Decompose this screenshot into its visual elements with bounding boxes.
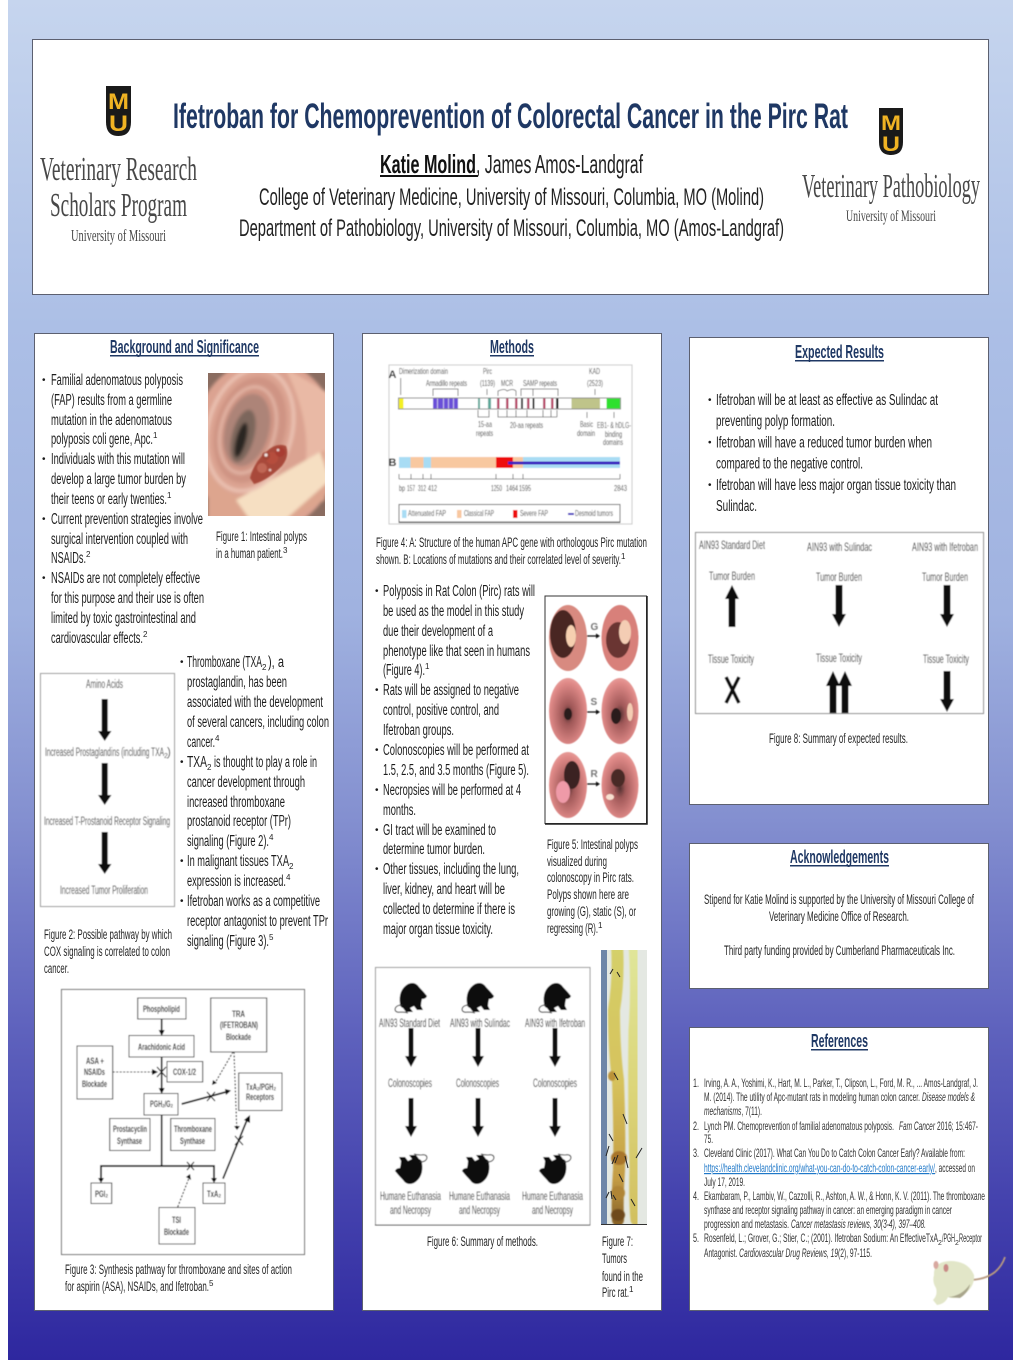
heading: expected results — [795, 342, 884, 362]
figure 3: thromboxane synthesis pathway: TSI — [172, 1215, 181, 1225]
figure 8: expected results summary — [696, 532, 984, 714]
text block: background bullets: Individuals with this mutation will — [51, 451, 185, 468]
figure 4: APC gene structure diagram: MCR — [501, 378, 513, 388]
text block: thromboxane bullets: In malignant tissues TXA — [187, 853, 289, 870]
heading: acknowledgements: Acknowledgements — [790, 847, 889, 867]
text block: background bullets: • — [42, 454, 46, 465]
figure 2: pathway flowchart: Increased Prostaglandins (including TXA — [45, 747, 164, 759]
figure 6: summary of methods flowchart: Humane Euthanasia — [380, 1189, 441, 1203]
text block: methods bullets: • — [375, 864, 379, 875]
text block: acknowledgements — [704, 892, 974, 958]
figure 4: APC gene structure diagram: (2523) — [587, 378, 603, 388]
figure 3: thromboxane synthesis pathway: Arachidonic Acid — [138, 1042, 185, 1052]
text block: methods bullets: major organ tissue toxicity. — [383, 921, 493, 938]
text block: methods bullets: (Figure 4). — [383, 662, 425, 679]
text block: background bullets: 1 — [153, 431, 158, 440]
icon: inverted rat standard diet — [395, 1154, 427, 1184]
caption: figure 1: 3 — [283, 546, 288, 555]
text block: reference list: 2. — [693, 1119, 699, 1133]
text block: expected results bullets — [708, 392, 956, 515]
panel: references — [690, 1028, 1005, 1310]
figure 4: APC gene structure diagram: bp — [399, 483, 405, 493]
figure 8: expected results summary: AIN93 Standard Diet — [699, 538, 765, 552]
text block: reference list: 75. — [704, 1132, 713, 1146]
caption: figure 6: Figure 6: Summary of methods. — [427, 1234, 538, 1249]
figure 4: APC gene structure diagram: 20-aa repeats — [510, 420, 543, 430]
arrow: tumor burden up — [725, 585, 739, 627]
text block: methods bullets: liver, kidney, and heart will be — [383, 881, 505, 898]
arrow: prostaglandins to receptor signaling — [98, 763, 112, 805]
icon: MU shield left: M — [108, 89, 129, 114]
figure 3: thromboxane synthesis pathway: (IFETROBAN) — [220, 1020, 258, 1030]
figure 4: APC gene structure diagram: binding — [605, 429, 622, 439]
text block: thromboxane bullets: 5 — [269, 933, 274, 942]
text block: thromboxane bullets: ), a — [268, 654, 284, 671]
figure 2: pathway flowchart: Increased T-Prostanoid Receptor Signaling — [44, 816, 170, 828]
caption: figure 7: found in the — [602, 1269, 643, 1284]
text block: thromboxane bullets: signaling (Figure 2). — [187, 833, 269, 850]
figure 4: APC gene structure diagram: KAD — [589, 366, 600, 376]
header panel — [32, 40, 988, 294]
figure 6: summary of methods flowchart: AIN93 Standard Diet — [379, 1016, 440, 1030]
text block: thromboxane bullets: prostanoid receptor (TPr) — [187, 813, 291, 830]
text block: methods bullets: Colonoscopies will be performed at — [383, 742, 529, 759]
text block: methods bullets — [375, 583, 535, 938]
figure 4: APC gene structure diagram: domain — [577, 428, 595, 438]
text block: background bullets: for this purpose and their use is often — [51, 590, 204, 607]
text block: background bullets: surgical intervention coupled with — [51, 531, 188, 548]
text block: expected results bullets: • — [708, 480, 712, 491]
text block: thromboxane bullets: prostaglandin, has been — [187, 674, 287, 691]
figure 6: summary of methods flowchart: AIN93 with Sulindac — [450, 1016, 510, 1030]
text block: methods bullets: Other tissues, including the lung, — [383, 861, 519, 878]
figure 4: APC gene structure diagram: 2843 — [614, 483, 627, 493]
text block: thromboxane bullets: cancer development through — [187, 774, 305, 791]
text block: reference list — [693, 1076, 985, 1260]
figure 4: APC gene structure diagram: A — [388, 369, 396, 381]
caption: figure 7: 1 — [629, 1285, 634, 1294]
text block: methods bullets: Polyposis in Rat Colon (Pirc) rats will — [383, 583, 535, 600]
caption: figure 7: Tumors — [602, 1251, 627, 1266]
figure 8: expected results summary: AIN93 with Sulindac — [807, 540, 872, 554]
figure 3: thromboxane synthesis pathway: Blockade — [82, 1079, 107, 1089]
figure 2: pathway flowchart: Amino Acids — [86, 679, 123, 691]
arrows: toxicity double up — [826, 671, 852, 713]
figure 3: thromboxane synthesis pathway: TRA — [232, 1009, 245, 1019]
logo text: Veterinary Research Scholars Program: University of Missouri — [71, 226, 166, 245]
figure 4: APC gene structure diagram: Basic — [580, 419, 593, 429]
figure 4: APC gene structure diagram: repeats — [476, 428, 493, 438]
figure 6: summary of methods flowchart: AIN93 with Ifetroban — [525, 1016, 585, 1030]
panel: methods — [362, 334, 662, 1310]
text block: background bullets: 1 — [167, 491, 172, 500]
caption: figure 2: Figure 2: Possible pathway by which — [44, 927, 172, 942]
text block: reference list: 4. — [693, 1189, 699, 1203]
figure 6: summary of methods flowchart: Humane Euthanasia — [522, 1189, 583, 1203]
figure 4: APC gene structure diagram: SAMP repeats — [523, 378, 557, 388]
figure 4: APC gene structure diagram: B — [388, 457, 396, 469]
text block: reference list: Receptor — [959, 1231, 982, 1245]
text block: background bullets: mutation in the adenomatous — [51, 412, 172, 429]
text block: thromboxane bullets: 4 — [269, 833, 274, 842]
figure 8: expected results summary: Tumor Burden — [816, 570, 862, 584]
figure 3: thromboxane synthesis pathway: ASA + — [86, 1056, 104, 1066]
text block: thromboxane bullets: of several cancers, including colon — [187, 714, 329, 731]
text block: methods bullets: Rats will be assigned to negative — [383, 682, 519, 699]
text block: methods bullets: due their development of a — [383, 623, 493, 640]
text block: thromboxane bullets: • — [180, 856, 184, 867]
text block: reference list: progression and metastasis. — [704, 1217, 789, 1231]
icon: rat sulindac — [462, 983, 494, 1013]
text block: methods bullets: GI tract will be examined to — [383, 822, 496, 839]
figure 3: thromboxane synthesis pathway: Synthase — [180, 1136, 205, 1146]
legend: FAP severity — [399, 504, 620, 523]
panel: acknowledgements — [690, 844, 988, 988]
caption: figure 7: Figure 7: — [602, 1234, 633, 1249]
text block: thromboxane bullets: is thought to play a role in — [214, 754, 317, 771]
caption: figure 3 — [65, 1262, 292, 1294]
text block: thromboxane bullets: 4 — [286, 873, 291, 882]
figure 3: thromboxane synthesis pathway: Prostacyclin — [113, 1124, 147, 1134]
caption: figure 4: 1 — [621, 552, 626, 561]
icon: inverted rat sulindac — [462, 1154, 494, 1184]
figure 4: APC gene structure diagram: 157 — [407, 483, 415, 493]
text block: background bullets: limited by toxic gastrointestinal and — [51, 610, 196, 627]
text block: thromboxane bullets: expression is increased. — [187, 873, 286, 890]
text block: thromboxane bullets — [180, 654, 329, 950]
text block: background bullets: • — [42, 514, 46, 525]
caption: figure 2: COX signaling is correlated to colon — [44, 944, 170, 959]
icon: no toxicity X — [726, 677, 739, 703]
figure 3: thromboxane synthesis pathway: Thromboxane — [174, 1124, 212, 1134]
figure 6: summary of methods flowchart: Colonoscopies — [388, 1076, 432, 1090]
caption: figure 1: Figure 1: Intestinal polyps — [216, 529, 307, 544]
figure 6: summary of methods flowchart: Colonoscopies — [533, 1076, 577, 1090]
text block: thromboxane bullets: 2 — [262, 663, 267, 672]
text block: background bullets: Current prevention strategies involve — [51, 511, 203, 528]
caption: figure 5: visualized during — [547, 854, 607, 869]
text block: thromboxane bullets: 4 — [215, 734, 220, 743]
text block: reference list: 5. — [693, 1231, 699, 1245]
text block: methods bullets: 1 — [425, 662, 430, 671]
text block: methods bullets: Necropsies will be performed at 4 — [383, 782, 521, 799]
text block: methods bullets: control, positive control, and — [383, 702, 499, 719]
heading: background and significance: Background and Significance — [110, 337, 259, 357]
icon: rat ifetroban — [539, 983, 571, 1013]
text block: reference list: July 17, 2019. — [704, 1175, 745, 1189]
figure 6: summary of methods flowchart: Humane Euthanasia — [449, 1189, 510, 1203]
heading: references: References — [811, 1031, 868, 1051]
text block: background bullets: NSAIDs. — [51, 550, 86, 567]
text block: thromboxane bullets: • — [180, 657, 184, 668]
logo text: Veterinary Research Scholars Program: Scholars Program — [50, 187, 187, 224]
text block: reference list: 2 — [938, 1240, 942, 1247]
icon: MU shield right — [879, 108, 903, 156]
icon: MU shield right: U — [882, 133, 900, 156]
caption: figure 3: Figure 3: Synthesis pathway for thromboxane and sites of action — [65, 1262, 292, 1277]
figure 4: APC gene structure diagram: 312 — [418, 483, 426, 493]
text block: thromboxane bullets: signaling (Figure 3). — [187, 933, 269, 950]
text block: reference list: 1. — [693, 1076, 699, 1090]
text block: background bullets: NSAIDs are not completely effective — [51, 570, 200, 587]
heading: methods — [490, 337, 534, 357]
figure 4: APC gene structure diagram: 15-aa — [478, 419, 492, 429]
icon: MU shield left: U — [109, 111, 128, 136]
text block: reference list: , accessed on — [935, 1161, 975, 1175]
figure 4: APC gene structure diagram: Pirc — [483, 366, 492, 376]
panel: expected results — [690, 338, 988, 804]
text block: acknowledgements: Veterinary Medicine Office of Research. — [769, 909, 909, 924]
text block: thromboxane bullets: associated with the development — [187, 694, 323, 711]
figure 3: thromboxane synthesis pathway: NSAIDs — [84, 1067, 105, 1077]
legend: FAP severity: Attenuated FAP — [408, 508, 446, 518]
legend: FAP severity: Desmoid tumors — [575, 508, 613, 518]
text block: background bullets: their teens or early twenties. — [51, 491, 167, 508]
caption: figure 7: Pirc rat. — [602, 1285, 629, 1300]
figure 3: thromboxane synthesis pathway: Blockade — [226, 1032, 251, 1042]
caption: figure 2: cancer. — [44, 961, 69, 976]
logo text: Veterinary Research Scholars Program — [40, 151, 197, 245]
text block: reference list: 3. — [693, 1146, 699, 1160]
text block: thromboxane bullets: TXA — [187, 754, 207, 771]
figure 8: expected results summary: Tissue Toxicity — [816, 651, 862, 665]
logo text: Veterinary Research Scholars Program: Veterinary Research — [40, 151, 197, 188]
text block: reference list: mechanisms, 7(11). — [704, 1104, 762, 1118]
figure 4: APC gene structure diagram: (1139) — [480, 378, 495, 388]
figure 3: thromboxane synthesis pathway: PGI₂ — [95, 1189, 108, 1199]
text block: methods bullets: phenotype like that seen in humans — [383, 643, 530, 660]
icon: rat standard diet — [395, 983, 427, 1013]
figure 4: APC gene structure diagram — [388, 365, 632, 524]
caption: figure 5: colonoscopy in Pirc rats. — [547, 870, 634, 885]
text block: background bullets: develop a large tumor burden by — [51, 471, 186, 488]
logo text: Veterinary Pathobiology — [802, 168, 980, 225]
text block: methods bullets: determine tumor burden. — [383, 841, 485, 858]
text block: thromboxane bullets: Ifetroban works as a competitive — [187, 893, 320, 910]
caption: figure 1 — [216, 529, 307, 561]
figure 4: APC gene structure diagram: 1595 — [519, 483, 531, 493]
caption: figure 5: growing (G), static (S), or — [547, 904, 636, 919]
text block: methods bullets: 1.5, 2.5, and 3.5 months (Figure 5). — [383, 762, 529, 779]
legend: FAP severity: Severe FAP — [520, 508, 548, 518]
caption: figure 1: in a human patient. — [216, 546, 283, 561]
caption: figure 2 — [44, 927, 172, 976]
figure 4: APC gene structure diagram: Dimerization domain — [399, 366, 448, 376]
arrow: toxicity down ifetroban — [940, 671, 954, 712]
text block: thromboxane bullets: 2 — [207, 763, 212, 772]
figure 4: APC gene structure diagram: Armadillo repeats — [426, 378, 467, 388]
figure 5: colonoscopy photo grid — [545, 596, 647, 824]
arrow: tumor burden down ifetroban — [940, 585, 954, 627]
panel: background and significance — [34, 334, 340, 1310]
text block: methods bullets: • — [375, 586, 379, 597]
figure 6: summary of methods flowchart: Colonoscopies — [456, 1076, 499, 1090]
figure 3: thromboxane synthesis pathway: TxA₂ — [207, 1189, 221, 1199]
text block: methods bullets: • — [375, 825, 379, 836]
text block: background bullets: 2 — [86, 550, 91, 559]
authors: Katie Molind — [380, 149, 476, 179]
figure 8: expected results summary: Tissue Toxicity — [708, 652, 754, 666]
icon: MU shield left — [106, 86, 131, 136]
text block: background bullets — [42, 372, 204, 647]
figure 6: summary of methods flowchart — [375, 968, 590, 1225]
text block: methods bullets: be used as the model in this study — [383, 603, 524, 620]
text block: background bullets: • — [42, 573, 46, 584]
figure 5: colonoscopy photo grid: R — [590, 769, 598, 780]
figure 5: colonoscopy photo grid: S — [590, 697, 598, 708]
arrow: receptor signaling to proliferation — [98, 832, 112, 874]
text block: methods bullets: months. — [383, 802, 416, 819]
caption: figure 4 — [376, 535, 647, 567]
icon: inverted rat ifetroban — [539, 1154, 571, 1184]
figure 6: summary of methods flowchart: and Necropsy — [532, 1203, 573, 1217]
figure 4: APC gene structure diagram: 412 — [428, 483, 437, 493]
caption: figure 5: regressing (R). — [547, 921, 598, 936]
figure 4: APC gene structure diagram: 1464 — [506, 483, 518, 493]
figure 4: APC gene structure diagram: 1250 — [491, 483, 502, 493]
text block: background bullets: polyposis coli gene, Apc. — [51, 431, 153, 448]
text block: expected results bullets: • — [708, 438, 712, 448]
figure 4: APC gene structure diagram: EB1- & hDLG- — [597, 420, 631, 430]
figure 3: thromboxane synthesis pathway: Phospholipid — [143, 1004, 180, 1014]
heading: references — [811, 1031, 868, 1051]
text block: methods bullets: • — [375, 685, 379, 696]
text block: background bullets: Familial adenomatous polyposis — [51, 372, 183, 389]
arrows: diet to colonoscopies — [405, 1028, 561, 1067]
figure 3: thromboxane synthesis pathway: COX-1/2 — [173, 1067, 196, 1077]
text block: background bullets: • — [42, 375, 46, 386]
text block: expected results bullets: • — [708, 395, 712, 406]
text block: thromboxane bullets: cancer. — [187, 734, 215, 751]
text block: methods bullets: Ifetroban groups. — [383, 722, 454, 739]
legend: FAP severity: Classical FAP — [464, 508, 494, 518]
figure 8: expected results summary: AIN93 with Ifetroban — [912, 540, 978, 554]
figure 2: pathway flowchart — [40, 674, 174, 906]
logo text: Veterinary Pathobiology: University of Missouri — [846, 208, 936, 225]
text block: reference list: /PGH — [942, 1231, 955, 1245]
caption: figure 5: 1 — [598, 921, 603, 930]
text block: thromboxane bullets: • — [180, 896, 184, 907]
text block: methods bullets: • — [375, 785, 379, 796]
figure 6: summary of methods flowchart: and Necropsy — [459, 1203, 500, 1217]
figure 3: thromboxane synthesis pathway: PGH₂/G₂ — [150, 1099, 173, 1109]
caption: figure 5: Polyps shown here are — [547, 887, 629, 902]
figure 3: thromboxane synthesis pathway: TxA₂/PGH₂ — [246, 1082, 276, 1092]
text block: reference list: Disease models & — [922, 1090, 975, 1104]
text block: reference list: 2016; 15:467- — [937, 1119, 978, 1133]
figure 5: colonoscopy photo grid: G — [590, 622, 598, 633]
text block: reference list: Antagonist. Cardiovascular Drug Reviews, 19(2), 97-115. — [704, 1246, 872, 1260]
figure 8: expected results summary: Tissue Toxicity — [923, 652, 969, 666]
figure 4: APC gene structure diagram: domains — [603, 437, 623, 447]
text block: reference list: 2 — [955, 1240, 959, 1247]
text block: expected results bullets: Sulindac. — [716, 498, 757, 515]
caption: figure 3: 5 — [209, 1279, 214, 1288]
text block: expected results bullets: preventing polyp formation. — [716, 413, 835, 430]
arrow: tumor burden down sulindac — [832, 585, 846, 627]
figure 3: thromboxane synthesis pathway: Blockade — [164, 1227, 189, 1237]
text block: reference list: Fam Cancer — [899, 1119, 936, 1133]
text block: background bullets: (FAP) results from a germline — [51, 392, 172, 409]
text block: thromboxane bullets: increased thromboxane — [187, 794, 285, 811]
figure 3: thromboxane synthesis pathway: Receptors — [246, 1092, 274, 1102]
figure 2: pathway flowchart: ) — [167, 747, 171, 759]
heading: expected results: Expected Results — [795, 342, 884, 362]
authors — [380, 149, 643, 179]
caption: figure 7 — [602, 1234, 643, 1300]
caption: figure 8: Figure 8: Summary of expected results. — [769, 731, 908, 746]
caption: figure 3: for aspirin (ASA), NSAIDs, and Ifetroban. — [65, 1279, 209, 1294]
authors: , James Amos-Landgraf — [476, 149, 643, 179]
caption: figure 5 — [547, 837, 638, 936]
figure 8: expected results summary: Tumor Burden — [922, 570, 968, 584]
heading: acknowledgements — [790, 847, 889, 867]
text block: background bullets: cardiovascular effects. — [51, 630, 143, 647]
figure 2: pathway flowchart: Increased Tumor Proliferation — [60, 885, 148, 897]
text block: thromboxane bullets: • — [180, 757, 184, 768]
text block: thromboxane bullets: Thromboxane (TXA — [187, 654, 262, 671]
figure 6: summary of methods flowchart: and Necropsy — [390, 1203, 431, 1217]
text block: methods bullets: • — [375, 745, 379, 756]
icon: white rat — [933, 1257, 1005, 1305]
heading: methods: Methods — [490, 337, 534, 357]
figure 1: polyp endoscopy photo — [208, 373, 325, 516]
figure 7: tumors in the Pirc rat photo — [601, 944, 647, 1225]
icon: MU shield right: M — [881, 112, 901, 135]
text block: thromboxane bullets: receptor antagonist to prevent TPr — [187, 913, 328, 930]
text block: methods bullets: collected to determine if there is — [383, 901, 515, 918]
arrow: amino acids to prostaglandins — [98, 699, 112, 741]
caption: figure 5: Figure 5: Intestinal polyps — [547, 837, 638, 852]
arrows: colonoscopies to necropsy — [405, 1098, 561, 1137]
text block: expected results bullets: compared to the negative control. — [716, 456, 863, 472]
caption: figure 4: shown. B: Locations of mutations and their correlated level of severity. — [376, 552, 621, 567]
text block: thromboxane bullets: 2 — [289, 862, 294, 871]
caption: figure 4: Figure 4: A: Structure of the human APC gene with orthologous Pirc mutation — [376, 535, 647, 550]
figure 3: thromboxane synthesis pathway: Synthase — [117, 1136, 142, 1146]
text block: background bullets: 2 — [143, 630, 148, 639]
figure 3: thromboxane synthesis pathway — [62, 990, 304, 1254]
figure 2: pathway flowchart: 2 — [164, 753, 168, 760]
figure 8: expected results summary: Tumor Burden — [709, 569, 755, 583]
